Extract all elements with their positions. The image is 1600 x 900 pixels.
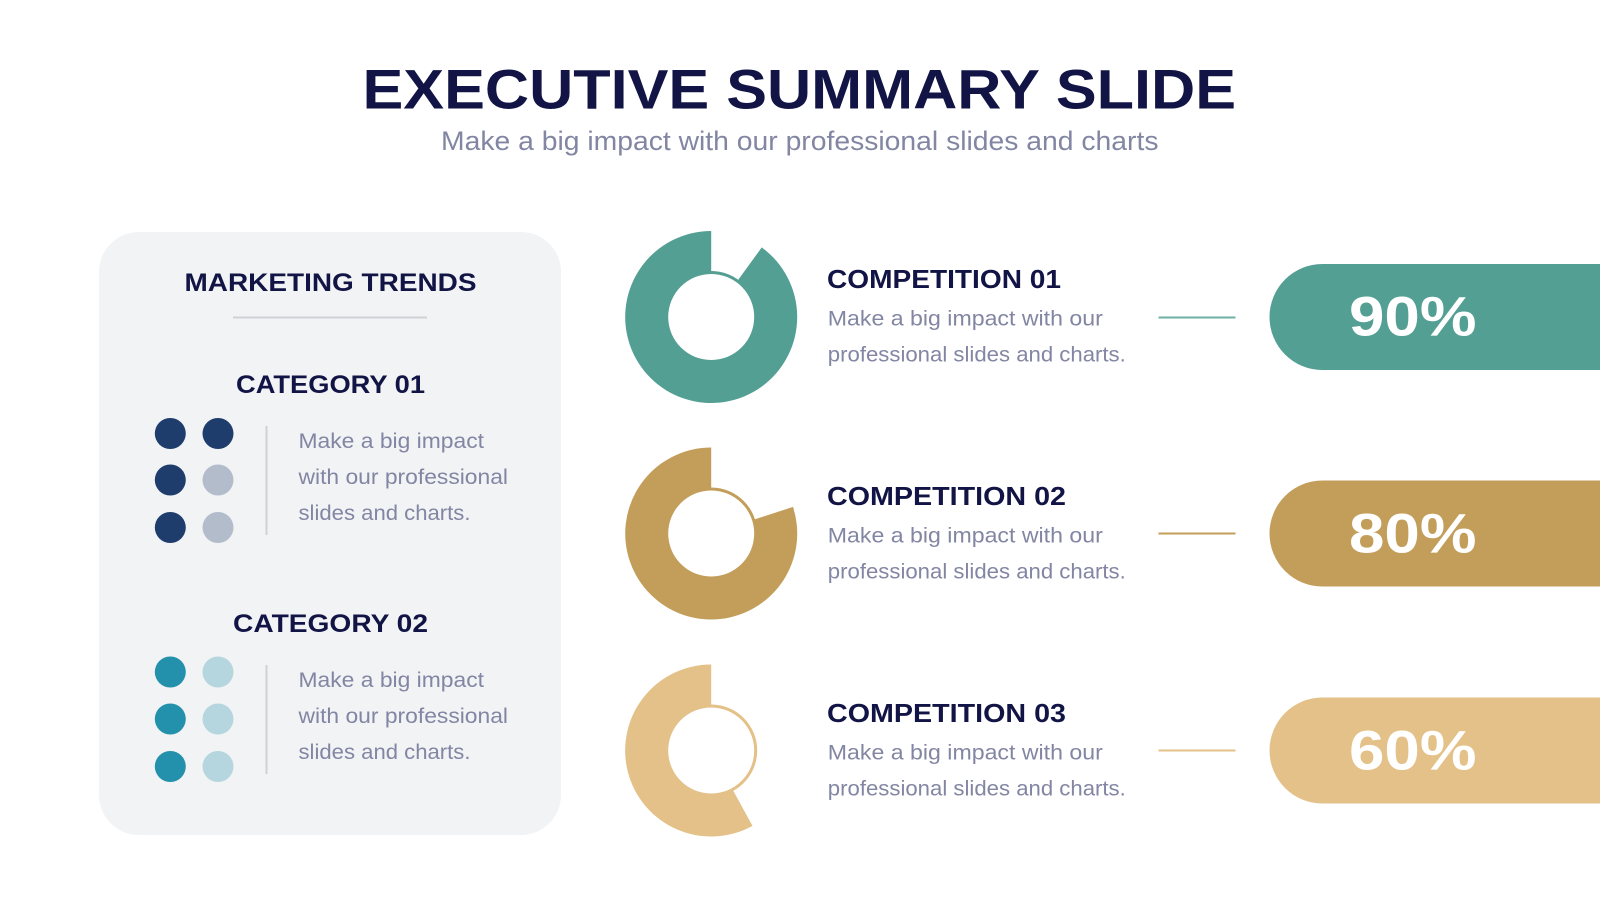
category 01 text: with our professional — [297, 465, 508, 489]
connector 03 — [1158, 750, 1236, 752]
connector 01 — [1158, 316, 1236, 318]
category 02 text: slides and charts. — [298, 740, 470, 764]
category 02 — [155, 610, 508, 782]
percent pill 03: 60% — [1349, 718, 1476, 782]
percent pill 01: 90% — [1349, 284, 1476, 348]
subtitle: Make a big impact with our professional slides and charts — [441, 126, 1158, 156]
competition 02 text — [828, 524, 1126, 584]
competition 02 heading: COMPETITION 02 — [827, 483, 1066, 511]
connector 02 — [1158, 532, 1236, 534]
category 01 text: Make a big impact — [298, 429, 484, 453]
competition 01 text: Make a big impact with our — [828, 306, 1103, 330]
panel heading: MARKETING TRENDS — [184, 269, 476, 297]
category 01 heading: CATEGORY 01 — [236, 371, 425, 399]
category 02 dot rating — [155, 656, 234, 782]
competition 01 heading: COMPETITION 01 — [827, 266, 1061, 294]
percent pill 02: 80% — [1349, 502, 1476, 564]
competition 03 text: Make a big impact with our — [828, 740, 1103, 764]
competition 03 text — [828, 740, 1126, 800]
donut chart: competition 01 — [625, 231, 797, 403]
competition 01 text — [828, 306, 1126, 366]
competition 03 text: professional slides and charts. — [828, 776, 1126, 800]
percent pill 03 — [1270, 698, 1600, 804]
competition 03 heading: COMPETITION 03 — [827, 700, 1066, 728]
percent pill 02 — [1270, 480, 1600, 586]
category 01 dot rating — [155, 418, 234, 543]
category 02 heading: CATEGORY 02 — [233, 610, 428, 638]
panel: marketing trends — [99, 232, 561, 835]
category 01 text: slides and charts. — [298, 501, 470, 525]
category 01 text — [297, 429, 508, 525]
category 01 — [155, 371, 508, 543]
competition 02 text: professional slides and charts. — [828, 560, 1126, 584]
category 02 text: Make a big impact — [298, 668, 484, 692]
title: EXECUTIVE SUMMARY SLIDE — [362, 58, 1236, 120]
competition 02 text: Make a big impact with our — [828, 524, 1103, 548]
category 02 text: with our professional — [297, 704, 508, 728]
category 02 text — [297, 668, 508, 764]
competition 01 text: professional slides and charts. — [828, 342, 1126, 366]
percent pill 01 — [1270, 264, 1600, 370]
donut chart: competition 03 — [625, 664, 757, 836]
donut chart: competition 02 — [625, 448, 797, 620]
